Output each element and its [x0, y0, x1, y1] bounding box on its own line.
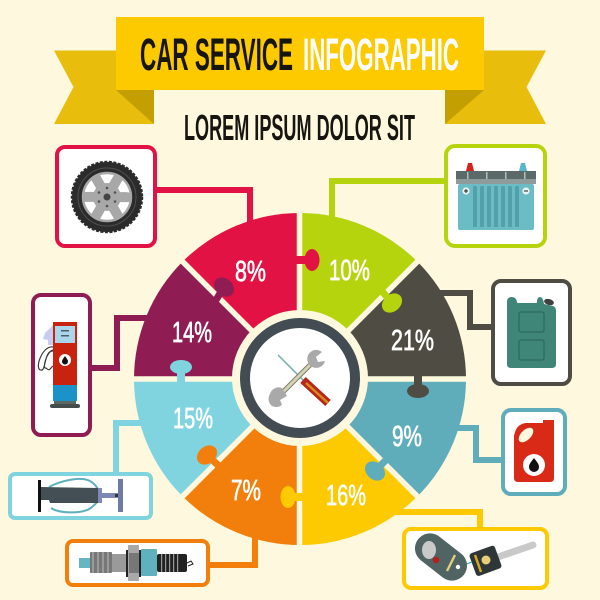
percent labels: 8%: [235, 256, 266, 288]
panel: car keys: [404, 527, 547, 588]
percent labels: 9%: [392, 421, 422, 453]
title text: CAR SERVICE: [140, 29, 293, 80]
icon: oil canister: [514, 420, 554, 482]
panel: fuel pump: [33, 295, 90, 435]
panel: spark plug: [67, 541, 208, 585]
percent labels: 7%: [231, 475, 261, 507]
icon: wrench: [269, 350, 325, 407]
icon: spark plug: [79, 545, 193, 581]
panel: hand pump: [10, 474, 151, 518]
icon: car keys: [409, 527, 533, 587]
connector lines: [92, 181, 501, 565]
title banner: [54, 17, 546, 124]
panel: oil canister: [503, 410, 565, 494]
panel: jerrycan: [493, 281, 570, 384]
percent labels: 16%: [326, 480, 366, 512]
panel: battery: [446, 146, 545, 246]
icon: hand pump: [38, 479, 123, 512]
percent labels: 14%: [172, 317, 212, 349]
percent labels: 15%: [173, 403, 213, 435]
icon: screwdriver: [278, 355, 328, 403]
pie chart segments: [131, 210, 469, 548]
center hub with tools: [232, 310, 368, 446]
icon: fuel pump: [38, 322, 80, 408]
puzzle tabs: [170, 249, 429, 508]
icon: jerrycan: [507, 297, 556, 368]
percent labels: [172, 255, 434, 512]
percent labels: 10%: [329, 255, 370, 287]
panel: tire: [57, 147, 155, 246]
percent labels: 21%: [391, 325, 434, 357]
icon: battery: [456, 163, 536, 230]
icon: tire: [72, 162, 142, 232]
